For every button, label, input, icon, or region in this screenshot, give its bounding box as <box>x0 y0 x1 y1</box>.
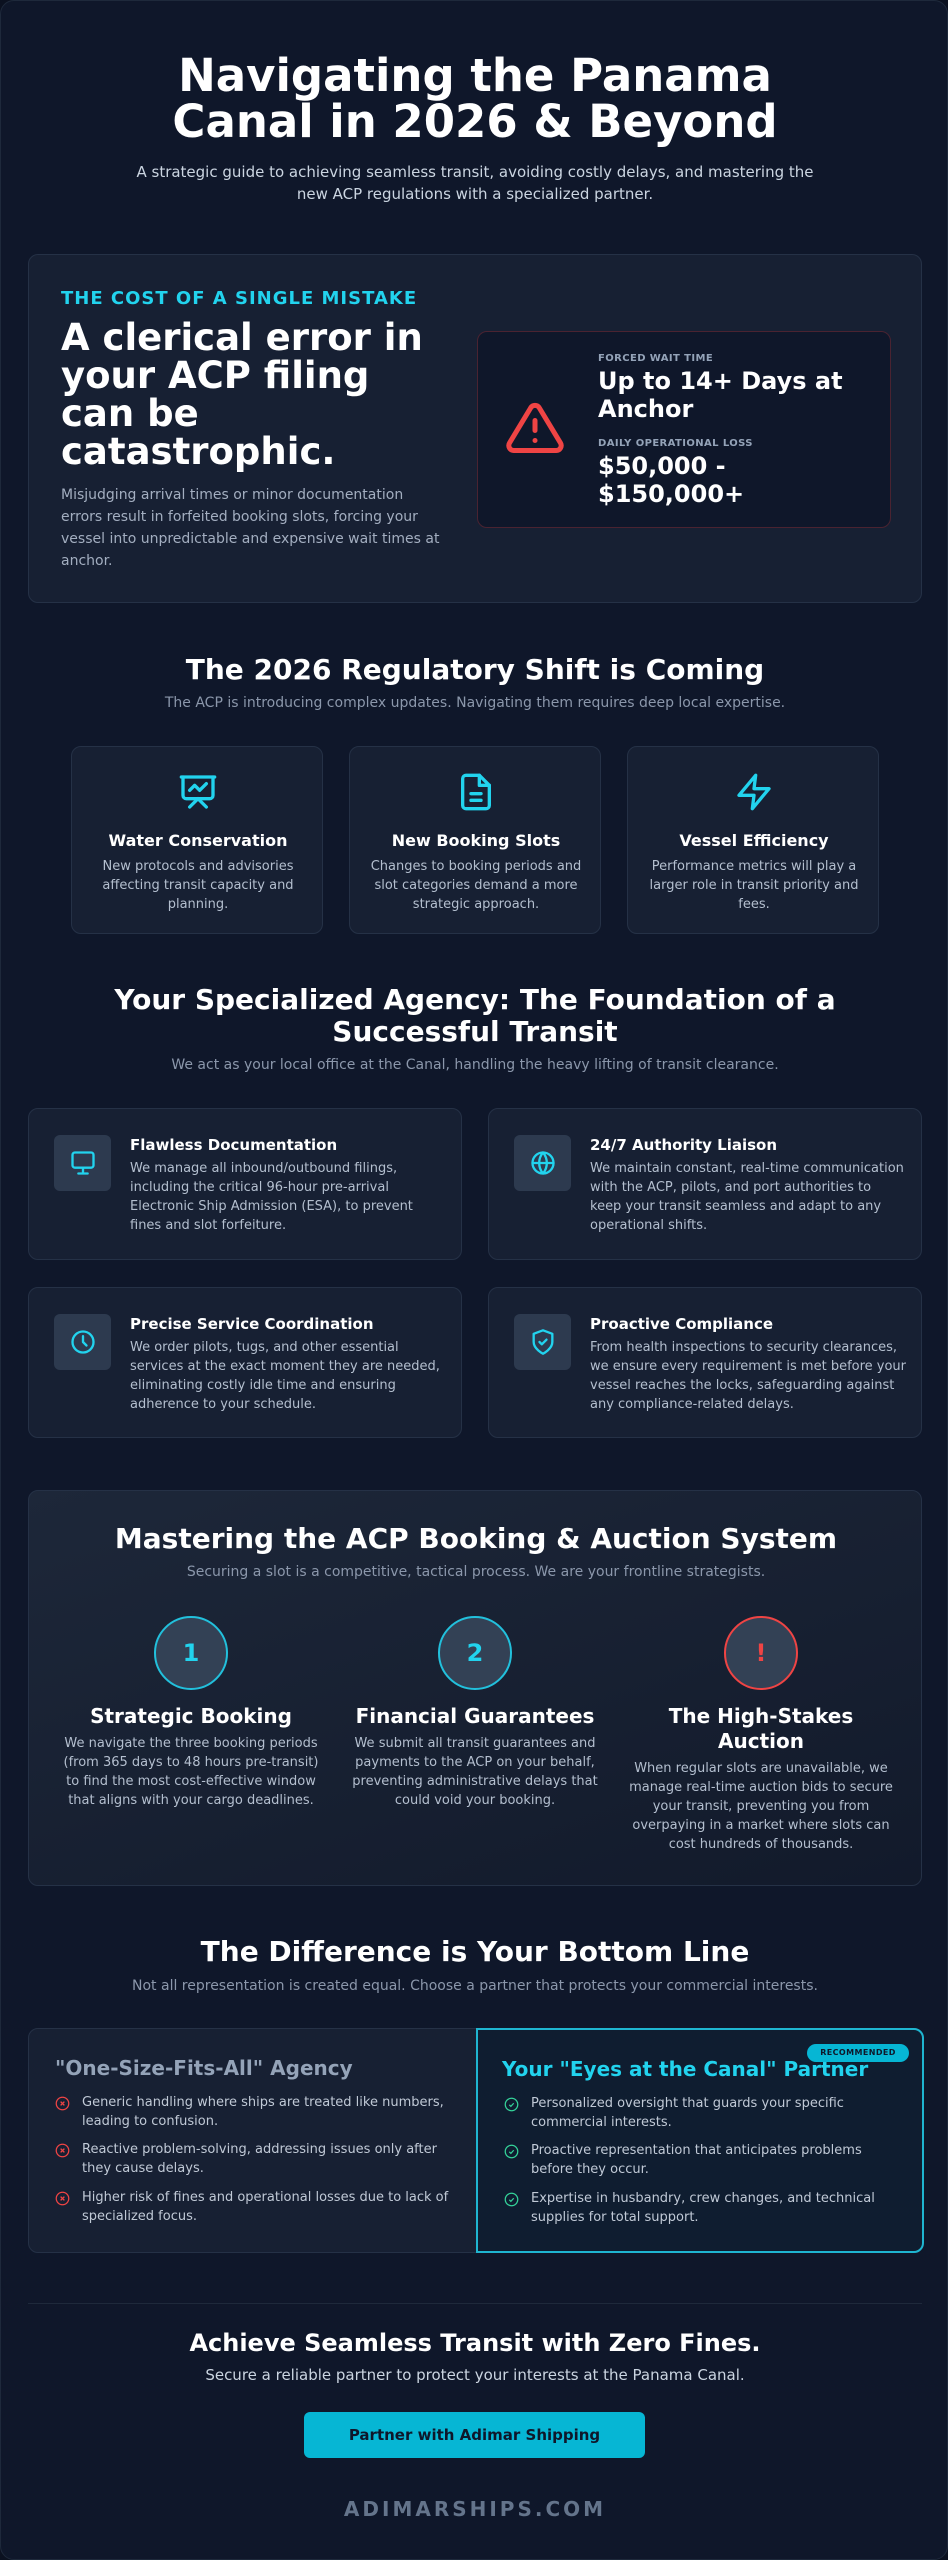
icon: lightning <box>737 774 771 810</box>
icon: globe <box>514 1135 571 1191</box>
column: generic agency: Generic handling where ships are treated like numbers, leading to confusion. <box>82 2095 444 2129</box>
icon: presentation chart <box>180 775 216 809</box>
step 3 <box>629 1616 893 1852</box>
icon: file <box>461 774 491 810</box>
panel: booking & auction system: ! <box>756 1639 766 1667</box>
card: water conservation: New protocols and advisories affecting transit capacity and planning. <box>102 859 294 912</box>
cta heading: Achieve Seamless Transit with Zero Fines. <box>189 2329 761 2357</box>
subheading: We act as your local office at the Canal, handling the heavy lifting of transit clearance. <box>171 1057 779 1073</box>
panel: booking & auction system: Auction <box>718 1729 804 1753</box>
column: eyes at the canal partner: Expertise in husbandry, crew changes, and technical supplies for total support. <box>531 2191 875 2225</box>
card: new booking slots: New Booking Slots <box>392 831 560 850</box>
heading: bottom line: The Difference is Your Bottom Line <box>201 1935 749 1968</box>
headline: A clerical error in your ACP filing can be catastrophic. <box>61 316 423 473</box>
column: generic agency <box>55 2056 448 2224</box>
stat box <box>477 331 891 528</box>
column: generic agency: "One-Size-Fits-All" Agency <box>55 2056 353 2080</box>
card: water conservation <box>71 746 323 934</box>
card: authority liaison: We maintain constant, real-time communication <box>590 1161 904 1176</box>
card: authority liaison: 24/7 Authority Liaison <box>590 1136 777 1154</box>
panel: booking & auction system: We submit all transit guarantees and payments to the ACP on your behalf, preventing administrative delays that could void your booking. <box>352 1736 598 1808</box>
card: proactive compliance: Proactive Compliance <box>590 1315 773 1333</box>
stat: daily loss: $50,000 - $150,000+ <box>598 452 744 508</box>
stat: daily loss: DAILY OPERATIONAL LOSS <box>598 438 753 449</box>
icon: clock <box>54 1314 111 1370</box>
title: Navigating the Panama <box>178 49 772 102</box>
panel: booking & auction system <box>28 1490 922 1886</box>
panel: booking & auction system: Financial Guarantees <box>356 1704 594 1728</box>
panel: booking & auction system: We navigate the three booking periods (from 365 days to 48 hours pre-transit) to find the most cost-effective window that aligns with your cargo deadlines. <box>64 1736 318 1808</box>
column: eyes at the canal partner: Your "Eyes at the Canal" Partner <box>502 2057 868 2081</box>
stat: wait time: Up to 14+ Days at Anchor <box>598 367 843 423</box>
panel: booking & auction system: 2 <box>467 1639 483 1667</box>
step 1 <box>64 1616 318 1808</box>
card: flawless documentation: Flawless Documentation <box>130 1136 337 1154</box>
icon: warning triangle <box>506 402 564 453</box>
subheading: Not all representation is created equal. Choose a partner that protects your commercial interests. <box>132 1978 818 1994</box>
subtitle: A strategic guide to achieving seamless transit, avoiding costly delays, and mastering the new ACP regulations with a specialized partner. <box>136 163 814 203</box>
card: new booking slots: Changes to booking periods and slot categories demand a more strategic approach. <box>371 859 581 912</box>
card: vessel efficiency <box>627 746 879 934</box>
stat: wait time: FORCED WAIT TIME <box>598 353 713 364</box>
card: authority liaison <box>488 1108 922 1260</box>
card: service coordination <box>28 1287 462 1438</box>
panel: booking & auction system: 1 <box>183 1639 199 1667</box>
card: authority liaison: with the ACP, pilots, and port authorities to <box>590 1180 871 1195</box>
subheading: Securing a slot is a competitive, tactical process. We are your frontline strategists. <box>187 1564 765 1580</box>
title: Canal in 2026 & Beyond <box>172 95 778 148</box>
card: service coordination: We order pilots, tugs, and other essential services at the exact moment they are needed, eliminating costly idle time and ensuring adherence to your schedule. <box>130 1340 440 1412</box>
column: eyes at the canal partner: Personalized oversight that guards your specific commercial interests. <box>531 2096 844 2130</box>
eyebrow: THE COST OF A SINGLE MISTAKE <box>61 288 417 309</box>
card: water conservation: Water Conservation <box>109 831 287 850</box>
column: eyes at the canal partner <box>476 2028 924 2253</box>
cta subtext: Secure a reliable partner to protect your interests at the Panama Canal. <box>205 2366 745 2384</box>
card: flawless documentation <box>28 1108 462 1260</box>
card: new booking slots <box>349 746 601 934</box>
card: vessel efficiency: Performance metrics will play a larger role in transit priority and fees. <box>650 859 858 912</box>
card: authority liaison: keep your transit seamless and adapt to any operational shifts. <box>590 1199 881 1233</box>
paragraph: Misjudging arrival times or minor documentation errors result in forfeited booking slots, forcing your vessel into unpredictable and expensive wait times at anchor. <box>61 487 439 569</box>
panel: booking & auction system: When regular slots are unavailable, we manage real-time auction bids to secure your transit, preventing you from overpaying in a market where slots can cost hundreds of thousands. <box>629 1761 893 1852</box>
card: proactive compliance: From health inspections to security clearances, we ensure every requirement is met before your vessel reaches the locks, safeguarding against any compliance-related delays. <box>590 1340 906 1412</box>
heading: regulatory shift: The 2026 Regulatory Shift is Coming <box>186 653 764 686</box>
heading: specialized agency: Your Specialized Agency: The Foundation of a Successful Transit <box>114 983 836 1048</box>
cta button <box>304 2412 645 2458</box>
step 2 <box>352 1616 598 1808</box>
column: eyes at the canal partner: Proactive representation that anticipates problems before they occur. <box>531 2143 862 2177</box>
subheading: The ACP is introducing complex updates. Navigating them requires deep local expertise. <box>165 695 785 711</box>
icon: shield check <box>514 1314 571 1370</box>
panel: comparison <box>28 2028 922 2253</box>
panel: booking & auction system: Strategic Booking <box>90 1704 292 1728</box>
column: generic agency: Higher risk of fines and operational losses due to lack of specialized focus. <box>82 2190 448 2224</box>
card: proactive compliance <box>488 1287 922 1438</box>
icon: monitor <box>54 1135 111 1191</box>
title <box>172 49 778 148</box>
card: vessel efficiency: Vessel Efficiency <box>679 831 829 850</box>
card: service coordination: Precise Service Coordination <box>130 1315 374 1333</box>
cta button: Partner with Adimar Shipping <box>349 2426 600 2444</box>
badge: recommended <box>807 2044 909 2062</box>
panel: booking & auction system: The High-Stakes <box>669 1704 853 1728</box>
footer url: ADIMARSHIPS.COM <box>344 2497 606 2521</box>
badge: recommended: RECOMMENDED <box>820 2048 896 2057</box>
card: flawless documentation: We manage all inbound/outbound filings, including the critical 96-hour pre-arrival Electronic Ship Admission (ESA), to prevent fines and slot forfeiture. <box>130 1161 413 1233</box>
panel: cost of a single mistake <box>28 254 922 603</box>
heading: Mastering the ACP Booking & Auction System <box>115 1522 837 1555</box>
column: generic agency: Reactive problem-solving, addressing issues only after they cause delays. <box>82 2142 437 2176</box>
